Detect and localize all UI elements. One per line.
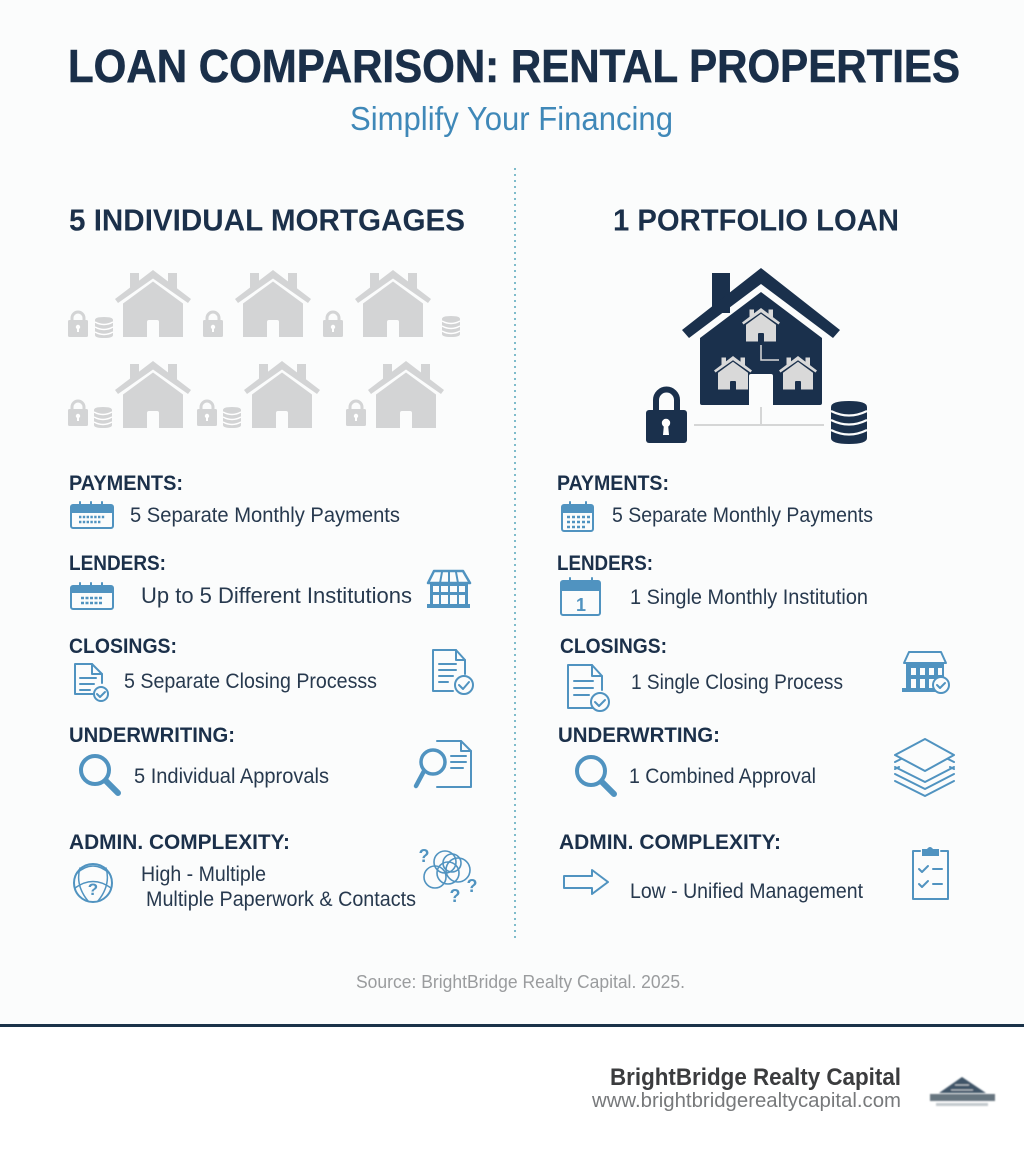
- row: lenders: LENDERS:: [557, 552, 653, 575]
- row: admin complexity: ADMIN. COMPLEXITY:: [69, 831, 290, 854]
- row: closings: [69, 635, 473, 701]
- icon: document check: [75, 664, 108, 701]
- icon: document with magnifier: [416, 741, 471, 787]
- row: closings: CLOSINGS:: [69, 635, 177, 658]
- icon: navy coin stack: [831, 401, 867, 444]
- icon: tangle with question marks: ?: [466, 876, 478, 896]
- icon: magnifier: [81, 756, 118, 793]
- row: lenders: [69, 552, 470, 609]
- icon: calendar: [562, 502, 593, 531]
- icon: tangle with question marks: [418, 846, 478, 906]
- icon: wide calendar: [71, 502, 113, 528]
- row: lenders: [557, 552, 868, 615]
- row: admin complexity: [69, 831, 478, 911]
- row: underwriting: UNDERWRTING:: [558, 724, 720, 747]
- footer: brand name and url: BrightBridge Realty Capital: [610, 1064, 901, 1091]
- icon: tangled globe with question mark: ?: [88, 880, 98, 899]
- footer rule: [0, 1024, 1024, 1027]
- center divider: [514, 168, 516, 940]
- row: lenders: Up to 5 Different Institutions: [141, 583, 412, 608]
- illustration: grey houses, locks and coins: [68, 270, 460, 428]
- icon: document check large: [433, 650, 473, 694]
- row: closings: CLOSINGS:: [560, 635, 667, 658]
- illustration: navy house containing three houses: [646, 268, 867, 444]
- icon: wide calendar: [71, 583, 113, 609]
- icon: tangled globe with question mark: [74, 864, 112, 902]
- row: payments: [69, 472, 400, 528]
- icon: bank with check: [902, 652, 949, 693]
- icon: clipboard checklist: [913, 847, 948, 899]
- footer: brand name and url: [591, 1064, 901, 1112]
- row: admin complexity: Low - Unified Management: [630, 880, 863, 903]
- row: admin complexity: [559, 831, 948, 903]
- description text: High - Multiple: [141, 863, 266, 886]
- icon: calendar one: [561, 578, 600, 615]
- heading: left column: 5 INDIVIDUAL MORTGAGES: [69, 204, 465, 238]
- row: lenders: LENDERS:: [69, 552, 166, 575]
- row: closings: 5 Separate Closing Processs: [124, 670, 377, 693]
- icon: calendar one: 1: [576, 595, 586, 615]
- panel: 5 individual mortgages: [68, 204, 478, 911]
- panel: 1 portfolio loan: [557, 204, 954, 903]
- icon: stacked layers: [895, 739, 954, 796]
- row: payments: PAYMENTS:: [69, 472, 183, 495]
- icon: outlined arrow: [564, 870, 608, 894]
- row: closings: 1 Single Closing Process: [631, 671, 843, 694]
- row: payments: PAYMENTS:: [557, 472, 669, 495]
- row: admin complexity: ADMIN. COMPLEXITY:: [559, 831, 781, 854]
- row: underwriting: [69, 724, 471, 793]
- icon: tangle with question marks: ?: [450, 886, 460, 906]
- row: underwriting: UNDERWRITING:: [69, 724, 235, 747]
- title: LOAN COMPARISON: RENTAL PROPERTIES: [68, 40, 960, 92]
- row: underwriting: [558, 724, 954, 796]
- description text: Multiple Paperwork & Contacts: [146, 888, 416, 911]
- footer logo: [930, 1077, 995, 1106]
- icon: bank building: [427, 571, 470, 608]
- row: closings: [560, 635, 949, 711]
- row: lenders: 1 Single Monthly Institution: [630, 586, 868, 609]
- row: underwriting: 5 Individual Approvals: [134, 765, 329, 788]
- row: underwriting: 1 Combined Approval: [629, 765, 816, 788]
- icon: navy padlock: [646, 390, 687, 443]
- icon: tangle with question marks: ?: [418, 846, 430, 866]
- source note: Source: BrightBridge Realty Capital. 2025.: [356, 972, 685, 992]
- icon: document check: [568, 665, 609, 711]
- row: payments: 5 Separate Monthly Payments: [130, 504, 400, 527]
- description text: [141, 863, 416, 911]
- heading: right column: 1 PORTFOLIO LOAN: [613, 204, 899, 238]
- row: payments: 5 Separate Monthly Payments: [612, 504, 873, 527]
- subtitle: Simplify Your Financing: [350, 100, 673, 137]
- footer: brand name and url: www.brightbridgerealtycapital.com: [591, 1090, 901, 1112]
- icon: magnifier: [577, 757, 614, 794]
- row: payments: [557, 472, 873, 531]
